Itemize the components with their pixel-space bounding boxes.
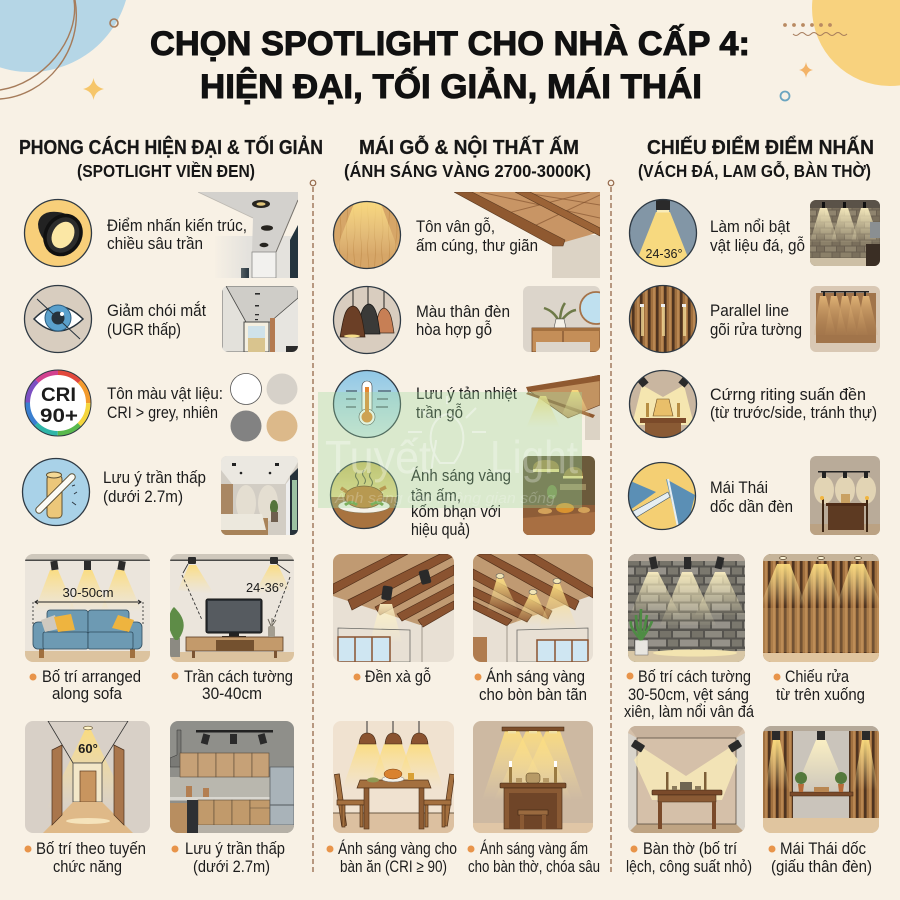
scene: stone wall bbox=[628, 554, 745, 662]
scene: tv wall: 24-36° bbox=[246, 581, 284, 595]
text: lamp colours bbox=[416, 303, 510, 339]
icon: sloped roof bbox=[628, 462, 696, 530]
heading: column 2: (ÁNH SÁNG VÀNG 2700-3000K) bbox=[344, 160, 591, 181]
text: lamp colours: hòa hợp gỗ bbox=[416, 320, 492, 339]
icon outline: warm meal bbox=[330, 462, 398, 528]
heading: column 3 bbox=[638, 136, 874, 181]
text: parallel line bbox=[710, 302, 802, 339]
heading: column 1: (SPOTLIGHT VIỀN ĐEN) bbox=[77, 160, 255, 181]
icon outline: low ceiling bbox=[22, 458, 90, 526]
caption: sofa: Bố trí arranged bbox=[42, 668, 141, 686]
icon outline: eye bbox=[24, 286, 92, 352]
icon outline: beam angle bbox=[630, 200, 696, 266]
icon: warm meal bbox=[330, 461, 398, 531]
icon outline: pendant lamps bbox=[334, 286, 400, 354]
caption: low ceiling kitchen: (dưới 2.7m) bbox=[193, 858, 270, 876]
caption: altar warm light bbox=[468, 839, 600, 876]
icon: CRI 90+: CRI bbox=[41, 384, 76, 406]
icon outline: thermometer bbox=[334, 370, 400, 438]
decoration: top left shapes bbox=[0, 0, 130, 100]
scene: corridor: 60° bbox=[78, 741, 98, 756]
caption: altar warm light: cho bàn thờ, chóa sâu bbox=[468, 858, 600, 876]
caption: hidden lamp body: (giấu thân đèn) bbox=[771, 858, 872, 876]
caption: warm light bbox=[474, 667, 587, 704]
text: low glare: Giảm chói mắt bbox=[107, 301, 206, 320]
caption: ceiling distance bbox=[172, 668, 293, 703]
icon: altar spotlights bbox=[630, 370, 696, 439]
icon: beam angle: 24-36° bbox=[646, 246, 682, 261]
caption: warm light: cho bòn bàn tãn bbox=[479, 686, 587, 704]
icon: pendant lamps bbox=[334, 287, 400, 353]
title: HIỆN ĐẠI, TỐI GIẢN, MÁI THÁI bbox=[200, 67, 702, 106]
text: warm light with meal bbox=[411, 466, 511, 539]
caption: hidden lamp body bbox=[768, 840, 872, 876]
scene: sofa track lights bbox=[25, 554, 150, 662]
caption: ceiling distance: 30-40cm bbox=[202, 685, 262, 703]
image: wood ceiling bbox=[454, 192, 600, 278]
scene: offset altar lights bbox=[628, 726, 745, 833]
text: architecture accent: Điểm nhấn kiến trúc, bbox=[107, 217, 247, 235]
panel: wood roof and warm interior bbox=[326, 135, 612, 876]
watermark: Tuyết Light: Tuyết bbox=[325, 431, 431, 483]
icon outline: wood grain bbox=[334, 202, 400, 268]
caption: altar warm light: Ánh sáng vàng ấm bbox=[480, 839, 588, 858]
caption: corridor: chức năng bbox=[53, 858, 122, 876]
icon: thermometer bbox=[334, 371, 400, 437]
icon: low ceiling warning bbox=[22, 458, 90, 526]
watermark: Tuyết Light bbox=[318, 392, 582, 508]
title: CHỌN SPOTLIGHT CHO NHÀ CẤP 4: bbox=[150, 25, 750, 63]
icon: beam angle bbox=[630, 199, 696, 270]
caption: wash from above: Chiếu rửa bbox=[785, 668, 850, 686]
text: sloped roof: dốc dần đèn bbox=[710, 498, 793, 516]
icon outline: wood slats bbox=[630, 286, 696, 352]
icon: CRI 90+ bbox=[25, 370, 91, 436]
caption: altar offset bbox=[626, 840, 752, 876]
heading: column 1 bbox=[19, 135, 323, 181]
text: heat dissipation bbox=[416, 385, 517, 422]
caption: dining: bàn ăn (CRI ≥ 90) bbox=[340, 858, 447, 876]
text: parallel line: Parallel line bbox=[710, 302, 789, 320]
scene: altar under warm light bbox=[473, 721, 593, 833]
heading: column 2 bbox=[344, 135, 591, 181]
image: warm dining bbox=[523, 456, 595, 535]
caption: corridor: Bố trí theo tuyến bbox=[36, 840, 146, 858]
text: material colour: Tôn màu vật liệu: bbox=[107, 385, 223, 403]
text: angle control: (từ trước/side, tránh thự) bbox=[710, 404, 877, 422]
caption: altar offset: lệch, công suất nhỏ) bbox=[626, 858, 752, 876]
icon: wood grain with light bbox=[334, 202, 400, 268]
icon outline: sloped roof bbox=[628, 462, 696, 530]
text: heat dissipation: Lưu ý tản nhiệt bbox=[416, 385, 517, 403]
caption: sofa: along sofa bbox=[52, 685, 123, 703]
text: parallel line: gõi rửa tường bbox=[710, 321, 802, 339]
text: wood grain: Tôn vân gỗ, bbox=[416, 217, 495, 236]
icon: CRI 90+: 90+ bbox=[40, 405, 78, 427]
caption: hidden lamp body: Mái Thái dốc bbox=[780, 840, 866, 858]
icon: reduced glare eye bbox=[24, 286, 92, 352]
image: recessed ceiling lights bbox=[198, 192, 298, 278]
text: architecture accent bbox=[107, 217, 247, 253]
caption: warm light: Ánh sáng vàng bbox=[486, 667, 585, 686]
heading: column 3: (VÁCH ĐÁ, LAM GỖ, BÀN THỜ) bbox=[638, 160, 871, 181]
watermark: Tuyết Light: Ánh sáng cho không gian sống bbox=[334, 490, 556, 507]
image: slat wall with track bbox=[810, 286, 880, 352]
text: warm light with meal: kốm bhạn với bbox=[411, 503, 501, 521]
image: hallway ceiling bbox=[222, 286, 298, 352]
decoration: top right shapes bbox=[780, 0, 900, 100]
text: warm light with meal: tần ấm, bbox=[411, 487, 461, 505]
text: low ceiling note bbox=[103, 469, 206, 506]
text: sloped roof: Mái Thái bbox=[710, 479, 768, 497]
scene: dining table bbox=[333, 721, 455, 833]
text: low glare bbox=[107, 301, 206, 339]
caption: stone wall bbox=[624, 668, 755, 721]
text: heat dissipation: trần gỗ bbox=[416, 403, 463, 422]
text: wood grain: ấm cúng, thư giãn bbox=[416, 237, 538, 255]
text: highlight materials: Làm nổi bật bbox=[710, 218, 790, 236]
text: architecture accent: chiều sâu trần bbox=[107, 235, 203, 253]
panel: modern and minimalist bbox=[19, 135, 323, 876]
text: angle control bbox=[710, 386, 877, 422]
text: highlight materials bbox=[710, 218, 805, 255]
heading: column 1: PHONG CÁCH HIỆN ĐẠI & TỐI GIẢN bbox=[19, 135, 323, 159]
text: warm light with meal: hiệu quả) bbox=[411, 521, 470, 539]
text: low ceiling note: Lưu ý trần thấp bbox=[103, 469, 206, 487]
scene: corridor bbox=[25, 721, 150, 833]
text: warm light with meal: Ánh sáng vàng bbox=[411, 466, 511, 485]
swatches: material colours bbox=[230, 374, 298, 442]
divider: column 1-2 bbox=[310, 180, 316, 875]
scene: warm light on beams bbox=[473, 554, 593, 662]
caption: wash from above bbox=[774, 668, 865, 704]
caption: dining: Ánh sáng vàng cho bbox=[338, 839, 457, 858]
caption: wash from above: từ trên xuống bbox=[776, 686, 865, 704]
scene: kitchen bbox=[170, 721, 294, 833]
caption: low ceiling kitchen bbox=[172, 840, 285, 876]
caption: corridor bbox=[24, 840, 146, 876]
title bbox=[150, 25, 750, 106]
caption: stone wall: Bố trí cách tường bbox=[638, 668, 751, 686]
text: material colour bbox=[107, 385, 223, 422]
text: highlight materials: vật liệu đá, gỗ bbox=[710, 236, 805, 255]
image: heat wood ceiling bbox=[526, 375, 600, 440]
caption: dining bbox=[326, 839, 457, 876]
text: wood grain bbox=[416, 217, 538, 255]
text: low ceiling note: (dưới 2.7m) bbox=[103, 488, 183, 506]
heading: column 3: CHIẾU ĐIỂM ĐIỂM NHẤN bbox=[647, 136, 874, 159]
caption: altar offset: Bàn thờ (bố trí bbox=[643, 840, 737, 858]
scene: beam spotlights bbox=[333, 554, 454, 662]
icon: black spotlight bbox=[24, 200, 92, 266]
watermark: Tuyết Light: Light bbox=[490, 431, 578, 483]
scene: sofa track lights: 30-50cm bbox=[62, 585, 114, 600]
caption: low ceiling kitchen: Lưu ý trần thấp bbox=[185, 840, 285, 858]
text: sloped roof bbox=[710, 479, 793, 516]
text: angle control: Cứrng riting suấn đền bbox=[710, 386, 866, 404]
heading: column 2: MÁI GỖ & NỘI THẤT ẤM bbox=[359, 135, 579, 159]
panel: accent lighting bbox=[624, 136, 882, 876]
image: altar with track lights bbox=[810, 456, 880, 535]
scene: wood slat wall bbox=[760, 554, 882, 662]
scene: tv wall bbox=[169, 554, 294, 662]
caption: stone wall: xiên, làm nổi vân đá bbox=[624, 703, 755, 721]
caption: stone wall: 30-50cm, vệt sáng bbox=[628, 686, 749, 704]
image: console table bbox=[523, 286, 600, 352]
caption: wood beam lamp: Đền xà gỗ bbox=[365, 667, 431, 686]
caption: ceiling distance: Trần cách tường bbox=[184, 668, 293, 686]
icon outline: altar spotlights bbox=[630, 370, 696, 438]
divider: column 2-3 bbox=[608, 180, 614, 875]
image: stone wall spotlights bbox=[810, 200, 880, 266]
text: low glare: (UGR thấp) bbox=[107, 321, 181, 339]
caption: sofa bbox=[30, 668, 141, 703]
text: material colour: CRI > grey, nhiên bbox=[107, 404, 218, 422]
icon: wood slats wash bbox=[630, 286, 696, 352]
image: bedroom with spotlights bbox=[221, 456, 298, 535]
text: lamp colours: Màu thân đèn bbox=[416, 303, 510, 321]
scene: sloped roof slats bbox=[763, 726, 879, 833]
